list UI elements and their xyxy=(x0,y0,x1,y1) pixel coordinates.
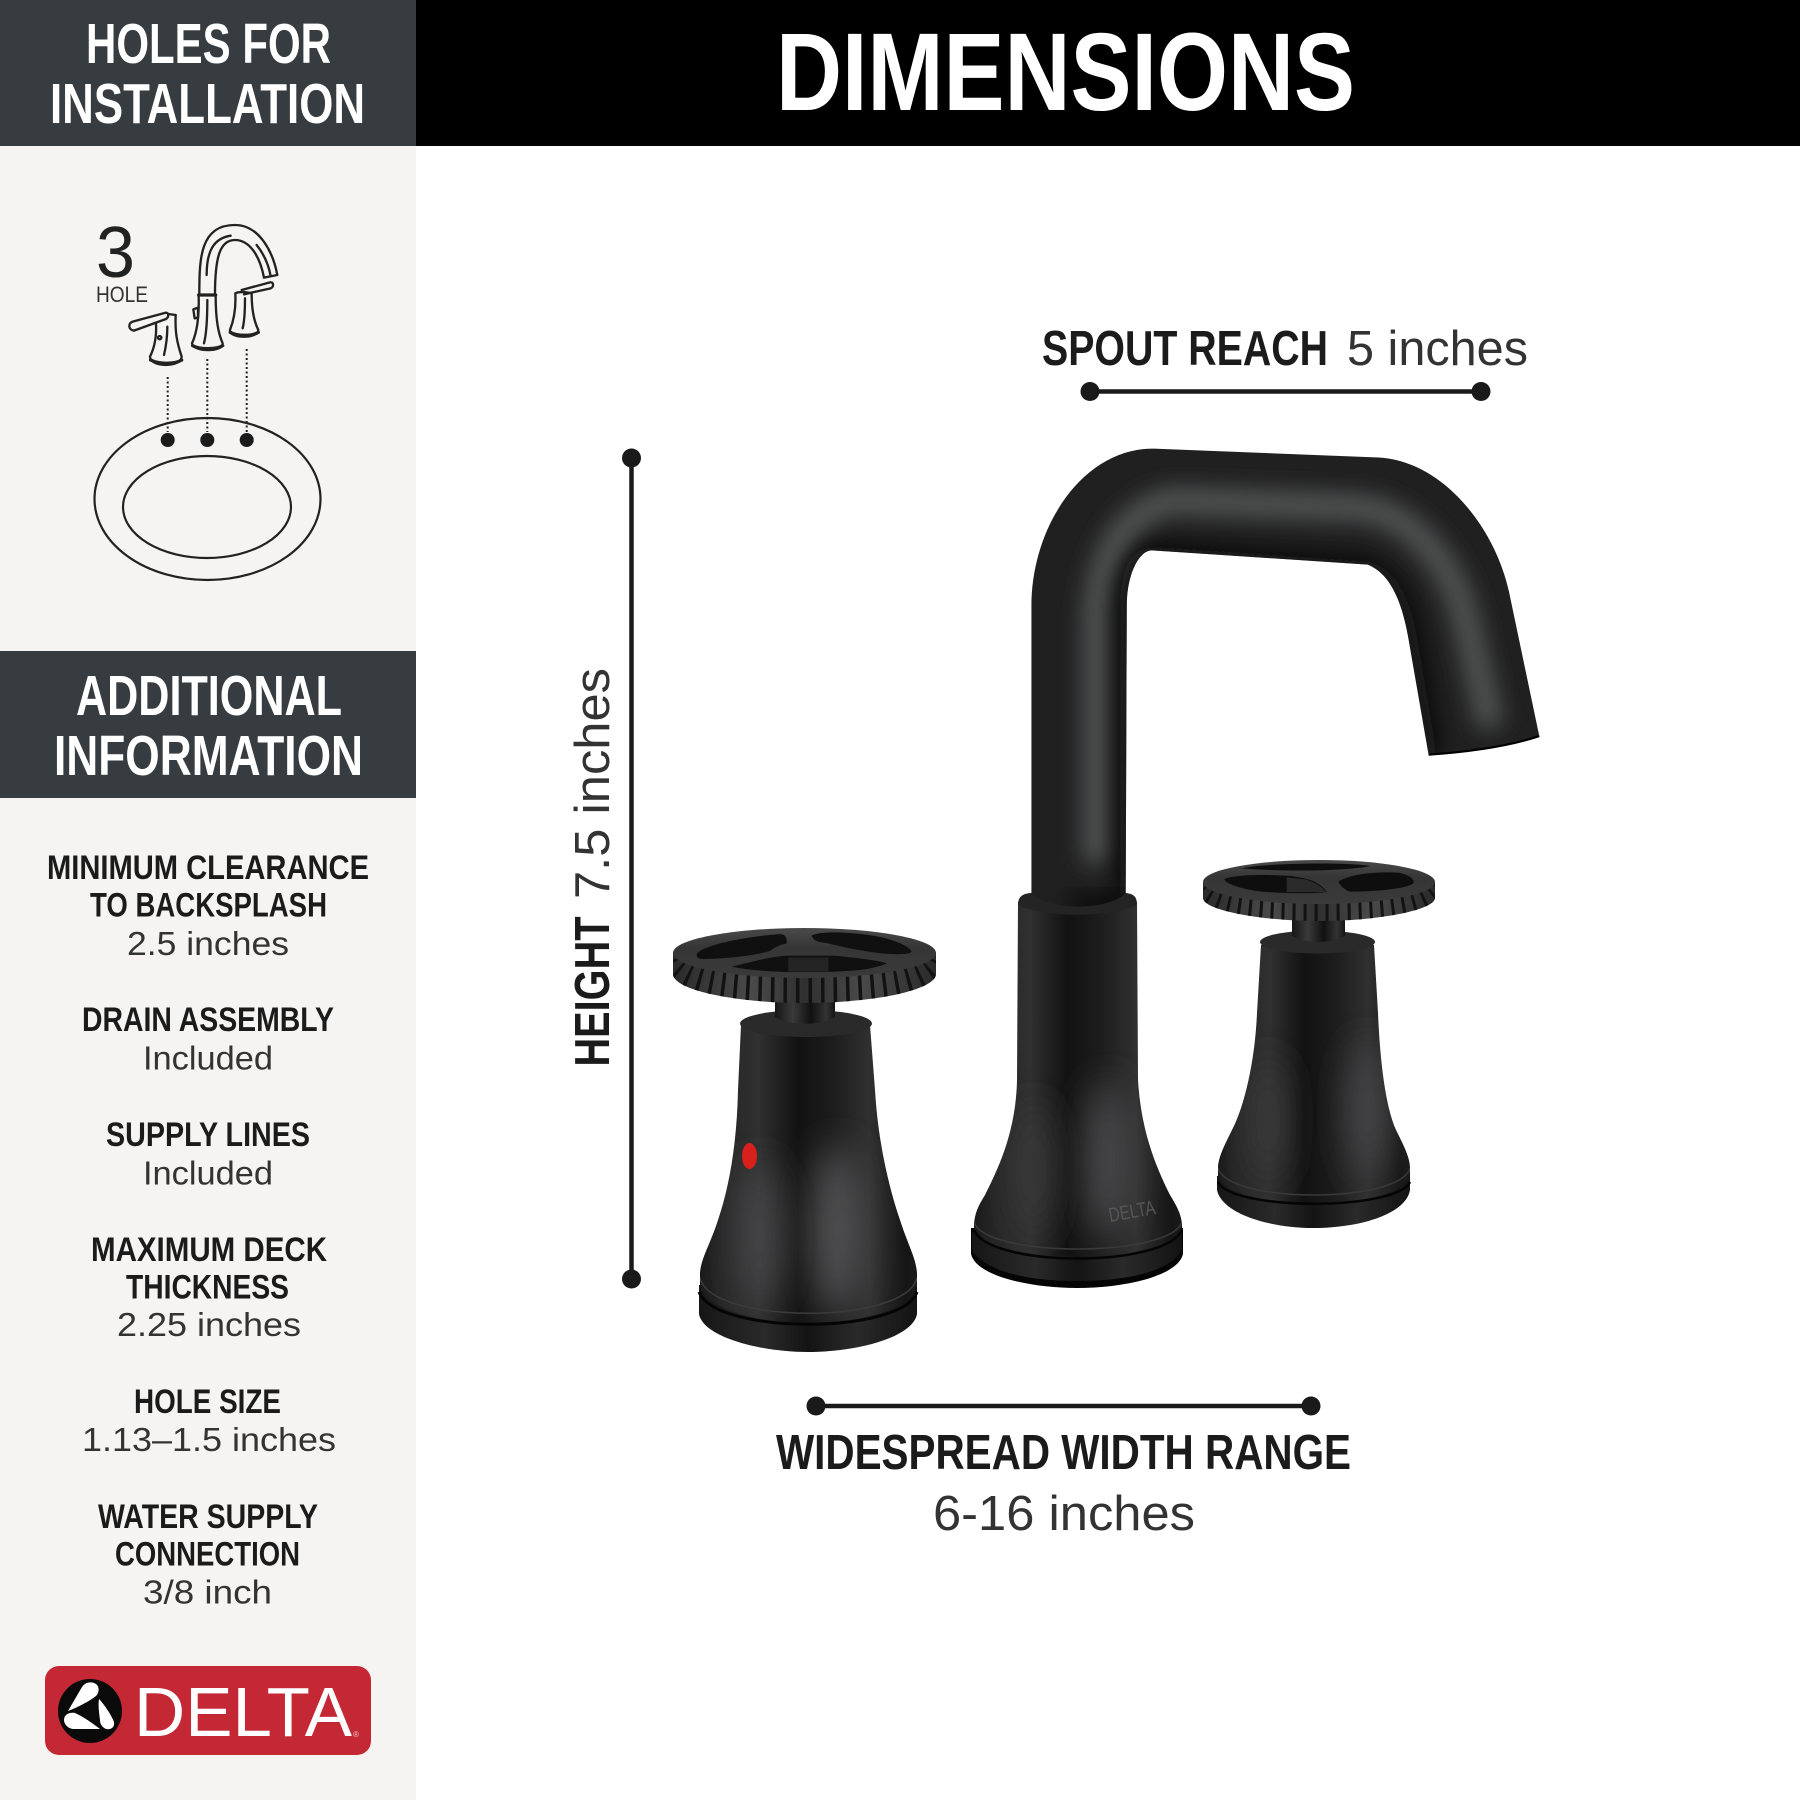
annotation: spout reach xyxy=(1042,322,1528,401)
text block: minimum clearance: TO BACKSPLASH xyxy=(90,886,327,924)
heading: additional information xyxy=(0,651,416,798)
product photo: matte black faucet xyxy=(665,449,1539,1352)
handwheel xyxy=(665,928,944,1003)
annotation: spout reach: 5 inches xyxy=(1347,322,1528,376)
text block: maximum deck thickness: MAXIMUM DECK xyxy=(91,1231,327,1269)
title banner: dimensions xyxy=(416,0,1800,146)
text block: maximum deck thickness xyxy=(91,1231,327,1343)
text block: hole size: 1.13–1.5 inches xyxy=(82,1421,336,1458)
heading: additional information: ADDITIONAL xyxy=(76,664,342,728)
annotation: height: 7.5 inches xyxy=(566,668,620,899)
text block: water supply connection: 3/8 inch xyxy=(143,1574,272,1610)
title banner: dimensions: DIMENSIONS xyxy=(776,11,1355,134)
panel: left sidebar xyxy=(0,0,416,1800)
center body xyxy=(971,893,1183,1288)
annotation: spout reach: SPOUT REACH xyxy=(1042,322,1328,376)
text block: water supply connection: WATER SUPPLY xyxy=(98,1498,318,1536)
heading: holes for installation: HOLES FOR xyxy=(86,12,331,76)
icon: sink basin xyxy=(94,418,320,580)
annotation: widespread width range: WIDESPREAD WIDTH RANGE xyxy=(776,1426,1351,1480)
heading: holes for installation: INSTALLATION xyxy=(50,72,365,136)
handwheel xyxy=(1196,860,1442,921)
text block: minimum clearance xyxy=(47,849,369,962)
diagram: 3 hole sink installation: 3 xyxy=(96,213,135,293)
text block: minimum clearance: MINIMUM CLEARANCE xyxy=(47,849,369,887)
diagram: 3 hole sink installation: HOLE xyxy=(96,282,148,307)
annotation: height: HEIGHT xyxy=(566,916,620,1066)
left handle xyxy=(665,928,944,1352)
text block: water supply connection: CONNECTION xyxy=(115,1536,300,1574)
hot water indicator xyxy=(742,1143,757,1169)
icon: mounting holes xyxy=(161,349,254,447)
text block: maximum deck thickness: THICKNESS xyxy=(126,1268,289,1306)
text block: supply lines xyxy=(106,1116,310,1192)
annotation: widespread width range: 6-16 inches xyxy=(933,1487,1195,1541)
annotation: height xyxy=(566,448,641,1288)
text block: hole size xyxy=(82,1383,336,1458)
text block: drain assembly: Included xyxy=(143,1040,273,1076)
text block: drain assembly: DRAIN ASSEMBLY xyxy=(82,1001,334,1039)
logo: delta: ® xyxy=(353,1730,359,1739)
logo: delta xyxy=(45,1666,371,1755)
right handle xyxy=(1196,860,1442,1228)
icon: line art faucet xyxy=(129,225,277,365)
embossed brand mark: DELTA xyxy=(1107,1197,1158,1227)
text block: maximum deck thickness: 2.25 inches xyxy=(117,1306,301,1343)
spout xyxy=(1031,449,1539,907)
text block: supply lines: Included xyxy=(143,1154,273,1192)
text block: water supply connection xyxy=(98,1498,318,1610)
text block: hole size: HOLE SIZE xyxy=(134,1383,281,1421)
text block: supply lines: SUPPLY LINES xyxy=(106,1116,310,1154)
heading: additional information: INFORMATION xyxy=(54,724,363,788)
logo: delta: DELTA xyxy=(134,1673,352,1751)
text block: drain assembly xyxy=(82,1001,334,1076)
diagram: 3 hole sink installation xyxy=(94,213,320,580)
heading: holes for installation xyxy=(0,0,416,146)
annotation: widespread width range xyxy=(776,1396,1351,1541)
text block: minimum clearance: 2.5 inches xyxy=(127,925,289,962)
